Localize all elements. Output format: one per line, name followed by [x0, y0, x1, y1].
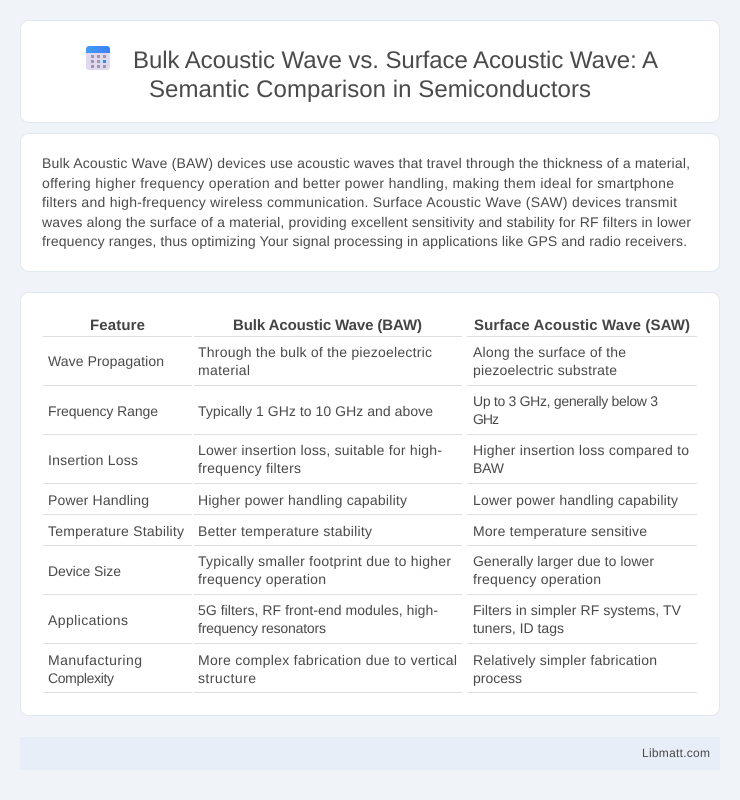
- row: power handling: Lower power handling capability: [473, 492, 678, 508]
- row: device size: Typically smaller footprint due to higher: [198, 553, 451, 569]
- table header: [90, 317, 690, 334]
- row: frequency range: Up to 3 GHz, generally below 3: [473, 393, 658, 409]
- row: device size: Generally larger due to lower: [473, 553, 654, 569]
- footer credit: Libmatt.com: [642, 746, 710, 760]
- title text: [133, 47, 658, 103]
- row: insertion loss: [48, 442, 689, 476]
- row: temperature stability: Better temperature stability: [198, 523, 372, 539]
- row: insertion loss: Insertion Loss: [48, 452, 138, 468]
- row: manufacturing complexity: Relatively simpler fabrication: [473, 652, 657, 668]
- panel: title: [20, 20, 720, 122]
- row: manufacturing complexity: Manufacturing: [48, 652, 142, 668]
- row: frequency range: Typically 1 GHz to 10 GHz and above: [198, 403, 433, 419]
- row: manufacturing complexity: structure: [198, 670, 256, 686]
- intro text: [41, 155, 691, 249]
- panel: intro paragraph: [20, 134, 720, 272]
- row: insertion loss: Lower insertion loss, suitable for high-: [198, 442, 442, 458]
- row: device size: Device Size: [48, 563, 121, 579]
- table header: Surface Acoustic Wave (SAW): [474, 317, 690, 334]
- table header: Bulk Acoustic Wave (BAW): [233, 317, 422, 334]
- row: frequency range: GHz: [473, 411, 499, 427]
- footer: [20, 737, 720, 770]
- row: wave propagation: material: [198, 362, 250, 378]
- row: power handling: Power Handling: [48, 492, 149, 508]
- row: device size: frequency operation: [198, 571, 326, 587]
- row: wave propagation: Wave Propagation: [48, 353, 164, 369]
- title text: Bulk Acoustic Wave vs. Surface Acoustic Wave: A: [133, 47, 658, 74]
- icon: calendar: [86, 46, 110, 70]
- intro text: filters and high-frequency wireless communication. Surface Acoustic Wave (SAW) devices transmit: [42, 194, 677, 210]
- intro text: Bulk Acoustic Wave (BAW) devices use acoustic waves that travel through the thickness of a material,: [42, 155, 690, 171]
- row: frequency range: [48, 393, 658, 427]
- row: wave propagation: Along the surface of the: [473, 344, 626, 360]
- row: wave propagation: Through the bulk of the piezoelectric: [198, 344, 432, 360]
- row: manufacturing complexity: More complex fabrication due to vertical: [198, 652, 457, 668]
- panel: comparison table: [20, 292, 720, 716]
- row: frequency range: Frequency Range: [48, 403, 158, 419]
- row: applications: tuners, ID tags: [473, 620, 564, 636]
- row: wave propagation: [48, 344, 626, 378]
- row: manufacturing complexity: process: [473, 670, 522, 686]
- row: applications: [48, 602, 682, 636]
- row: device size: frequency operation: [473, 571, 601, 587]
- title text: Semantic Comparison in Semiconductors: [149, 76, 591, 103]
- row: power handling: Higher power handling capability: [198, 492, 407, 508]
- row: temperature stability: [48, 523, 647, 539]
- table header: Feature: [90, 317, 145, 334]
- row: applications: frequency resonators: [198, 620, 326, 636]
- row: manufacturing complexity: [48, 652, 657, 686]
- intro text: waves along the surface of a material, providing excellent sensitivity and stability for RF filters in lower: [41, 214, 691, 230]
- row: temperature stability: More temperature sensitive: [473, 523, 647, 539]
- row: insertion loss: frequency filters: [198, 460, 301, 476]
- row: device size: [48, 553, 654, 587]
- row: insertion loss: Higher insertion loss compared to: [473, 442, 689, 458]
- row: insertion loss: BAW: [473, 460, 505, 476]
- row: power handling: [48, 492, 678, 508]
- row: manufacturing complexity: Complexity: [48, 670, 114, 686]
- row: wave propagation: piezoelectric substrate: [473, 362, 617, 378]
- intro text: frequency ranges, thus optimizing Your signal processing in applications like GPS and radio receivers.: [42, 233, 687, 249]
- intro text: offering higher frequency operation and better power handling, making them ideal for smartphone: [42, 175, 674, 191]
- row: applications: Filters in simpler RF systems, TV: [473, 602, 682, 618]
- row: temperature stability: Temperature Stability: [48, 523, 184, 539]
- row: applications: Applications: [48, 612, 128, 628]
- row: applications: 5G filters, RF front-end modules, high-: [198, 602, 438, 618]
